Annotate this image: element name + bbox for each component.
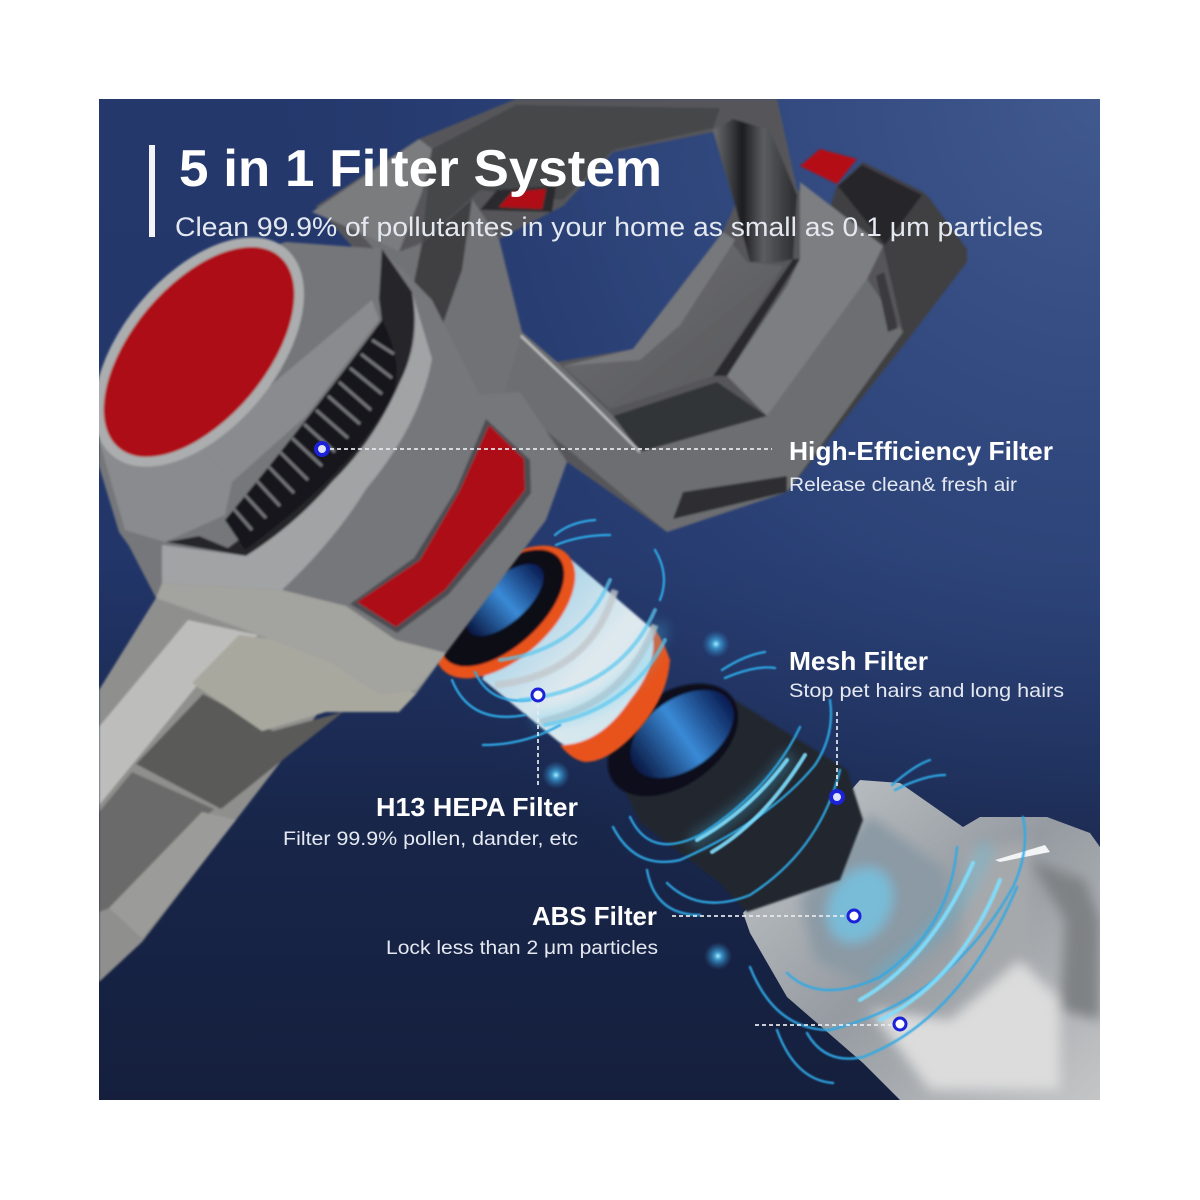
label: H13 HEPA filter: H13 HEPA Filter <box>376 792 578 822</box>
handle chrome column <box>713 119 797 262</box>
red latch <box>480 186 556 212</box>
label: high-efficiency filter: High-Efficiency Filter <box>789 436 1053 466</box>
title: 5 in 1 Filter System <box>179 140 662 198</box>
background panel <box>99 99 1100 1100</box>
label: H13 HEPA filter <box>283 792 578 850</box>
lower stem <box>99 598 446 982</box>
lower body chrome <box>156 583 446 695</box>
subtitle: Clean 99.9% of pollutantes in your home as small as 0.1 μm particles <box>175 212 1043 242</box>
arm <box>500 279 903 532</box>
outer ring <box>99 236 305 468</box>
label: ABS filter: Lock less than 2 μm particles <box>386 937 658 959</box>
label: high-efficiency filter: Release clean& fresh air <box>789 474 1018 496</box>
chrome trim around motor <box>162 292 432 590</box>
red side panel <box>350 419 531 633</box>
vacuum cleaner body <box>53 99 967 982</box>
airflow swirls <box>452 520 1025 1083</box>
dotted leader lines <box>330 449 892 1025</box>
label: ABS filter <box>386 901 658 959</box>
H13 HEPA filter <box>411 521 670 762</box>
upper stem <box>359 199 522 410</box>
title bar accent <box>149 145 155 237</box>
HEPA pleats <box>495 590 655 722</box>
mesh filter <box>587 660 863 912</box>
red disc <box>102 246 296 458</box>
label: mesh filter: Mesh Filter <box>789 646 928 676</box>
motor cylinder facet <box>200 249 382 483</box>
grip underside <box>563 232 783 409</box>
dust cup <box>743 780 1100 1100</box>
label: mesh filter: Stop pet hairs and long hairs <box>789 680 1064 702</box>
handle top band <box>422 105 720 242</box>
label: H13 HEPA filter: Filter 99.9% pollen, dander, etc <box>283 828 578 850</box>
handle frame <box>316 99 903 532</box>
exhaust grille <box>225 320 397 550</box>
label: ABS filter: ABS Filter <box>532 901 657 931</box>
label: high-efficiency filter <box>789 436 1053 496</box>
battery pack <box>794 148 968 482</box>
motor housing <box>99 242 567 677</box>
battery housing <box>727 182 883 416</box>
label: mesh filter <box>789 646 1064 702</box>
marker dots <box>316 443 906 1030</box>
glow dots <box>542 630 732 970</box>
dark band around grille <box>166 249 414 556</box>
